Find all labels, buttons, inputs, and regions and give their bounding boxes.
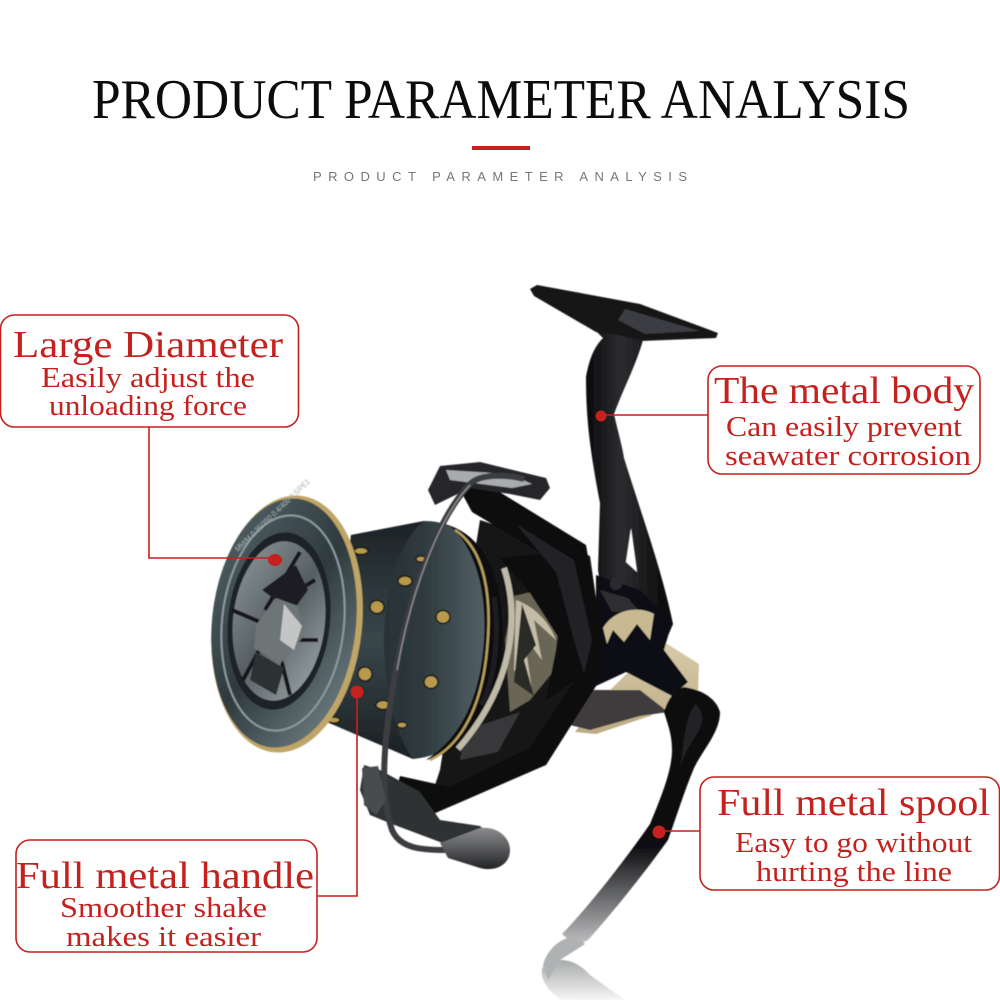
- stem and strut: [586, 331, 673, 650]
- hub highlight: [280, 604, 302, 650]
- callout heading: Large Diameter: [13, 324, 283, 366]
- callout heading: Full metal spool: [717, 782, 990, 824]
- upper black blob of rotor: [500, 552, 578, 640]
- bail knob: [440, 828, 510, 869]
- leader line: [317, 692, 357, 896]
- reel tail dark panel: [570, 690, 668, 730]
- title: PRODUCT PARAMETER ANALYSIS: [92, 69, 910, 131]
- skirt gold ring: [430, 530, 489, 760]
- spool inner ring: [219, 527, 339, 715]
- crank handle: [562, 687, 720, 946]
- gear housing: [596, 575, 688, 696]
- spool face lettering: MM/M 0.35/350 0.4/400 0.5/PE1: [233, 477, 312, 554]
- callout line 2: makes it easier: [66, 922, 262, 953]
- spool star spokes: [232, 552, 318, 695]
- rotor arm hexagon: [392, 480, 602, 818]
- spool face: [199, 491, 369, 755]
- leader line: [601, 414, 708, 416]
- spool dark inner panels: [262, 565, 308, 612]
- interior gold-silver mechanism: [505, 590, 562, 712]
- handle inner sheen: [680, 704, 702, 768]
- subtitle: PRODUCT PARAMETER ANALYSIS: [313, 169, 687, 184]
- callout box: [708, 366, 980, 474]
- reel tail: gold body: [575, 640, 699, 734]
- callout: The metal body: [596, 366, 980, 474]
- callout line 1: Easily adjust the: [41, 363, 255, 394]
- rotor arm facets: [460, 712, 520, 760]
- bail arm chrome detail: [446, 470, 532, 488]
- bail wire: [384, 476, 524, 850]
- callout heading: The metal body: [714, 370, 974, 412]
- callout box: [16, 840, 317, 952]
- callout box: [700, 777, 1000, 890]
- callout: Large Diameter: [0, 315, 298, 566]
- handle end cap: [543, 936, 585, 980]
- gold gear detail: [603, 610, 654, 644]
- red title divider: [472, 146, 530, 150]
- callout line 2: hurting the line: [756, 857, 952, 888]
- spool gold rim: [199, 488, 375, 760]
- lower line roller: [362, 766, 386, 815]
- callout line 2: unloading force: [49, 391, 247, 422]
- spool hole group: [328, 548, 450, 728]
- callout line 1: Smoother shake: [60, 893, 267, 924]
- skirt slot: [481, 597, 496, 705]
- callout box: [0, 315, 298, 427]
- leader line: [149, 427, 275, 558]
- marker dot: [652, 826, 666, 838]
- right black mass of rotor: [546, 600, 590, 700]
- black rear skirt: [426, 526, 503, 760]
- fishing reel illustration: [199, 285, 720, 1000]
- callout: Full metal spool: [652, 777, 1000, 890]
- marker dot: [268, 554, 282, 566]
- callout heading: Full metal handle: [16, 855, 314, 897]
- plate highlight: [618, 309, 700, 334]
- spool raised ring highlight: [211, 509, 355, 737]
- marker dot: [596, 410, 606, 422]
- bail wire highlight: [397, 485, 470, 670]
- callout line 1: Easy to go without: [735, 828, 972, 859]
- stem foot mount plate: [530, 285, 718, 341]
- callout: Full metal handle: [16, 686, 364, 953]
- leader line: [659, 830, 700, 832]
- rotor interior base: [430, 520, 602, 800]
- housing glossy panel: [600, 590, 640, 612]
- marker dot: [350, 686, 364, 698]
- handle reflection: [542, 960, 625, 1000]
- arm highlight: [516, 524, 592, 674]
- strut opening: [626, 528, 637, 572]
- callout line 2: seawater corrosion: [725, 441, 971, 472]
- spool lower panel: [250, 652, 284, 695]
- lower bail arm: [360, 765, 505, 862]
- callout line 1: Can easily prevent: [726, 412, 962, 443]
- spool centre hub: [254, 598, 304, 664]
- top bail arm: [428, 462, 550, 505]
- silver rotor ring: [458, 568, 512, 749]
- interior dark streaks: [514, 604, 536, 696]
- interior highlights: [514, 600, 556, 690]
- barrel upper shadow: [327, 521, 424, 759]
- rear flange and barrel: [327, 521, 503, 759]
- spool inner window: [225, 537, 333, 705]
- gear housing screw: [610, 578, 622, 590]
